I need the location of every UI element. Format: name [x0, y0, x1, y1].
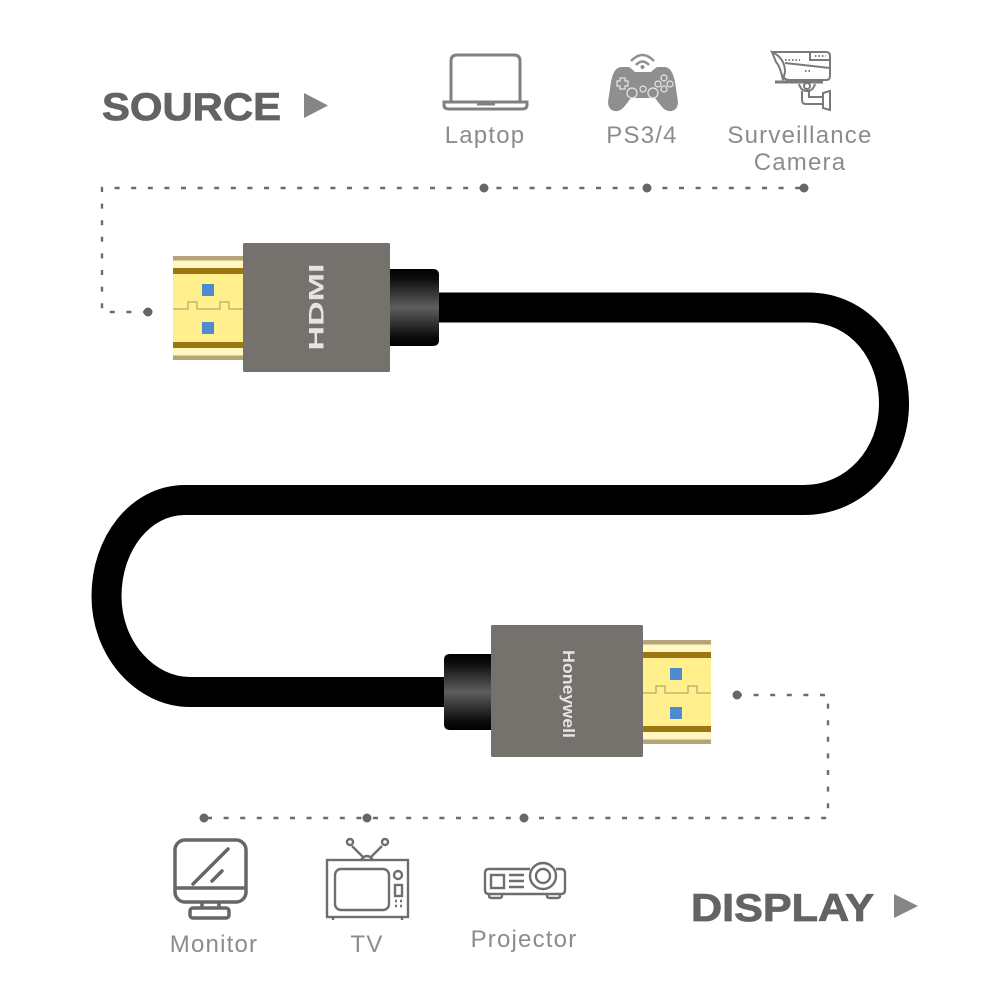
cable — [106, 308, 894, 692]
icon: game controller — [608, 55, 678, 111]
icon: laptop — [444, 55, 527, 109]
logo: Honeywell: Honeywell — [559, 650, 578, 738]
label: Monitor: Monitor — [170, 931, 258, 958]
label: PS3/4: PS3/4 — [606, 122, 678, 149]
collar — [390, 269, 439, 346]
label: Surveillance Camera: Surveillance — [727, 122, 873, 149]
connector line: source — [102, 184, 808, 316]
label: Projector: Projector — [471, 926, 577, 953]
arrow: source — [304, 93, 328, 118]
arrow: display — [894, 894, 918, 918]
icon: monitor — [175, 840, 246, 918]
icon: projector — [485, 863, 565, 898]
heading: DISPLAY: DISPLAY — [691, 887, 874, 930]
icon: surveillance camera — [772, 52, 830, 110]
heading: SOURCE: SOURCE — [102, 86, 281, 129]
metal housing — [491, 625, 643, 757]
HDMI connector: display end — [444, 625, 711, 757]
label: TV: TV — [350, 931, 384, 958]
metal housing — [243, 243, 390, 372]
collar — [444, 654, 491, 730]
icon: TV — [327, 839, 408, 920]
label: Surveillance Camera: Camera — [754, 149, 846, 176]
HDMI connector: source end — [173, 243, 439, 372]
gold plug — [643, 640, 711, 744]
connector line: display — [200, 690, 828, 822]
gold plug — [173, 256, 243, 360]
logo: HDMI: HDMI — [306, 264, 328, 350]
label: Laptop: Laptop — [445, 122, 525, 149]
